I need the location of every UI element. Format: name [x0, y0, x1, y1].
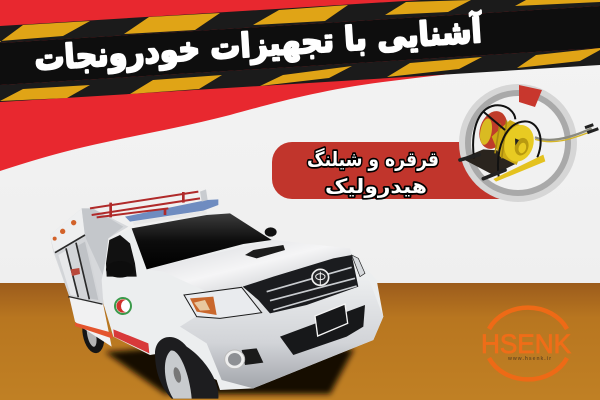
front flange	[500, 121, 538, 166]
coil	[475, 107, 512, 153]
hoops	[473, 105, 515, 158]
rear wheel	[79, 312, 107, 355]
drum	[492, 120, 530, 165]
rescue truck illustration	[50, 189, 383, 399]
red header swoosh	[0, 0, 600, 171]
headlight	[184, 287, 262, 318]
label text: reel and hose: قرقره و شیلنگ	[307, 147, 439, 171]
cab and bonnet	[102, 213, 383, 390]
base plate	[462, 149, 517, 175]
logo wordmark: HSENK	[481, 329, 571, 359]
badge ring	[459, 84, 577, 202]
windshield	[132, 213, 272, 269]
icon: hydraulic reel badge	[459, 84, 598, 202]
label text: reel and hose: هیدرولیک	[325, 174, 427, 198]
hazard tape band	[0, 0, 600, 102]
hood scoop	[245, 245, 285, 258]
label text: reel and hose	[307, 147, 439, 198]
rescue emblem	[115, 298, 131, 314]
logo ring	[489, 308, 567, 379]
logo: HSENK	[481, 308, 571, 379]
licence plate and lower intake	[280, 304, 365, 355]
red side stripe	[113, 329, 149, 353]
hoses	[535, 128, 592, 140]
yellow rail	[493, 155, 545, 182]
panel: hydraulic reel label pill	[272, 142, 500, 199]
truck shadow	[105, 345, 354, 394]
grille	[243, 255, 365, 313]
front wheel	[155, 337, 218, 399]
rescue box body	[50, 208, 128, 347]
side window and mirror	[106, 227, 277, 278]
reel drawing	[460, 105, 598, 182]
logo website: www.hsenk.ir	[507, 356, 552, 362]
fog lamp	[225, 348, 263, 369]
title: آشنایی با تجهیزات خودرونجات	[33, 10, 483, 79]
grip tubes	[460, 155, 505, 179]
roof rack and light bar	[90, 189, 218, 223]
